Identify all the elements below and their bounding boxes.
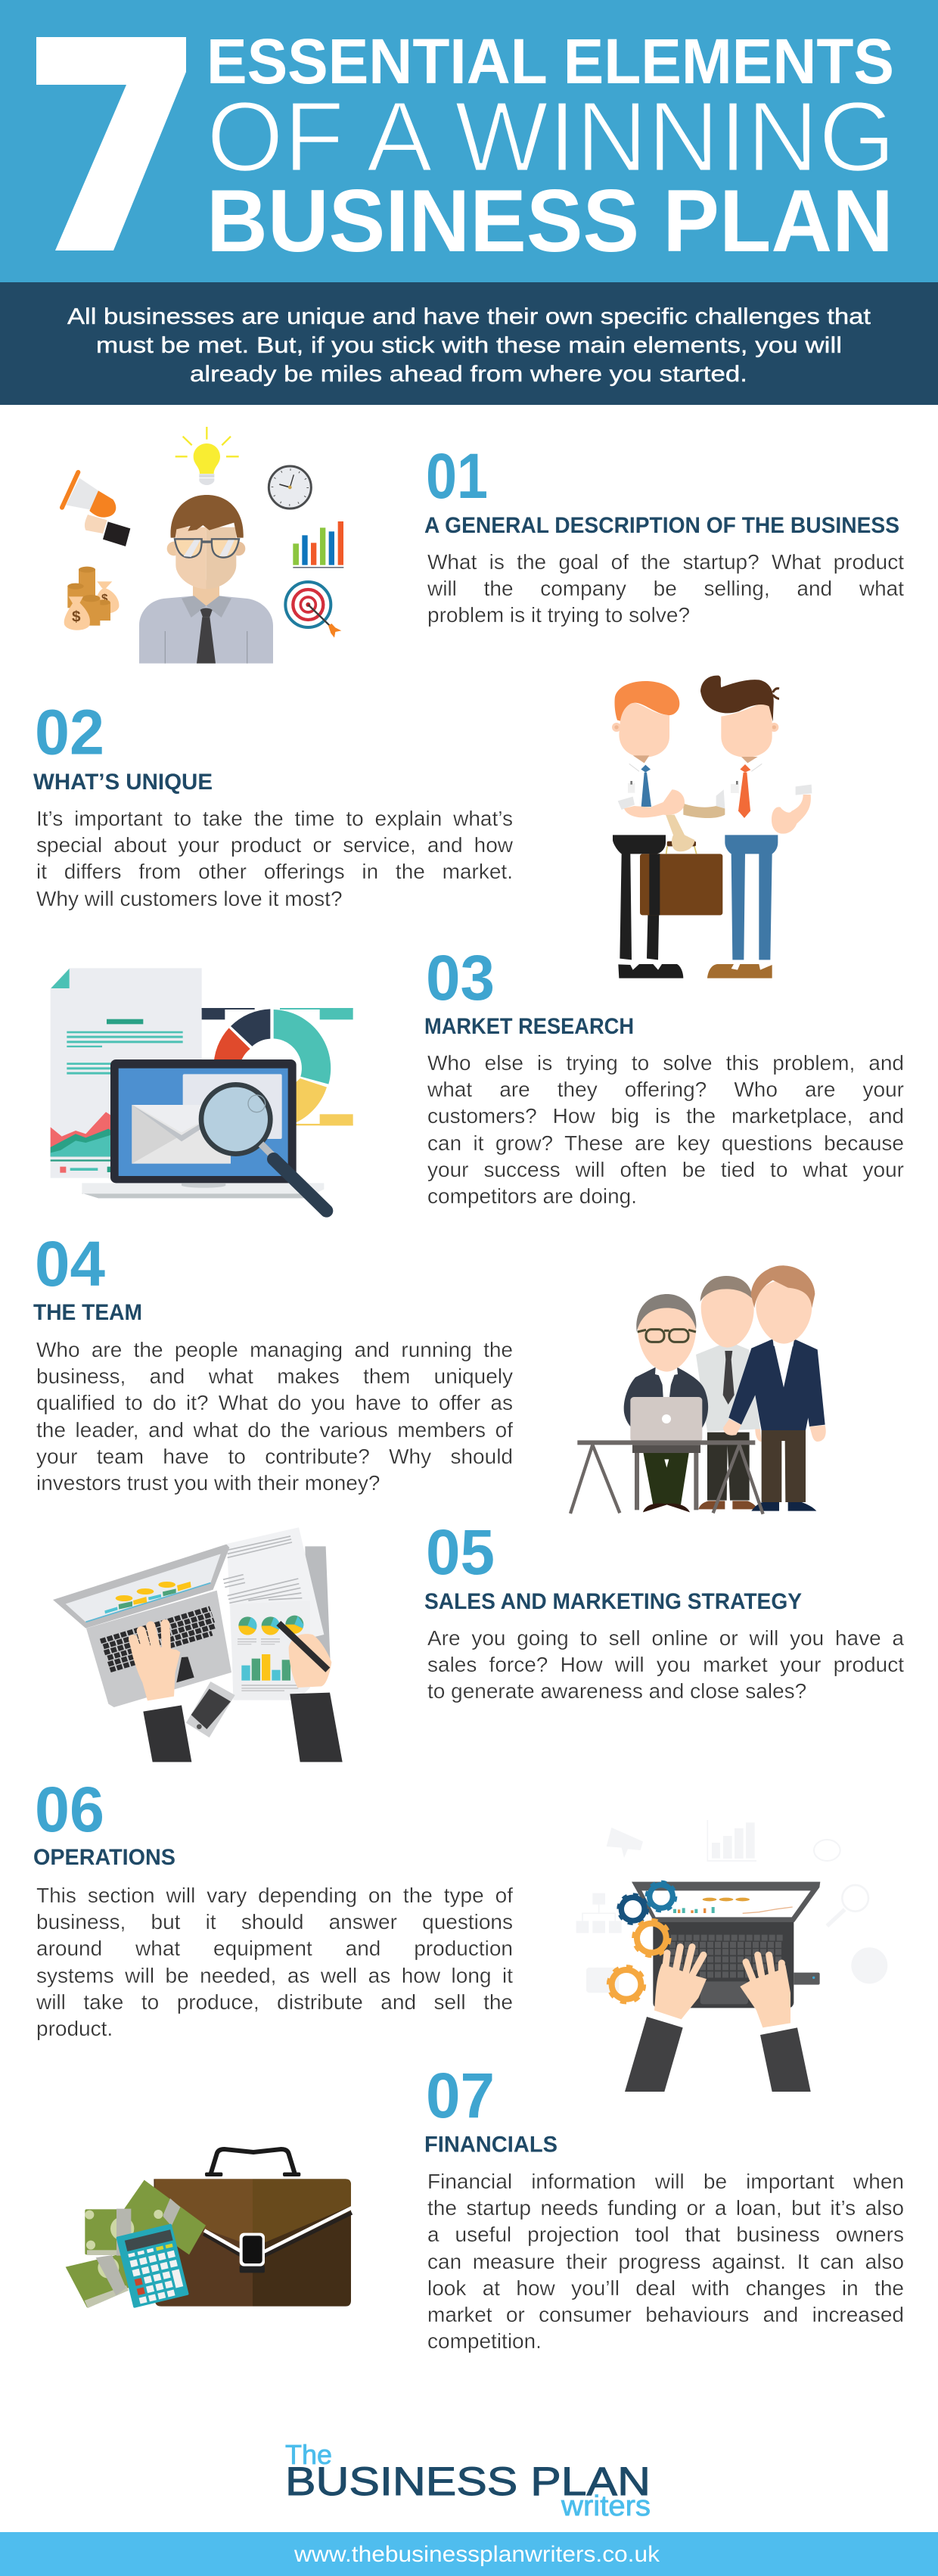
title: ESSENTIAL ELEMENTS — [207, 26, 894, 97]
body text: what are they offering? Who are your — [427, 1078, 904, 1101]
heading: OPERATIONS — [33, 1845, 175, 1870]
body text: your success will often be tied to what your — [427, 1158, 904, 1181]
illustration: businessman with ideas — [62, 427, 343, 664]
heading: FINANCIALS — [424, 2133, 558, 2157]
body text: Who are the people managing and running the — [36, 1338, 513, 1361]
calculator — [116, 2223, 189, 2308]
desk and laptop — [570, 1397, 763, 1514]
front man — [723, 1265, 826, 1511]
intro band: already be miles ahead from where you started. — [190, 362, 747, 387]
body text: the leader, and what do the various members of — [36, 1418, 513, 1442]
section 02 — [33, 696, 513, 915]
document — [51, 968, 202, 1178]
section 06 — [33, 1774, 513, 2045]
faint background icons — [576, 1820, 887, 1993]
cash bundles — [66, 2180, 206, 2308]
right hand and sleeve — [740, 1955, 811, 2092]
body text: What is the goal of the startup? What product — [427, 550, 904, 574]
big number seven — [36, 37, 186, 250]
body text: can it grow? These are key questions because — [427, 1131, 904, 1155]
section 07 — [424, 2060, 904, 2357]
businessman — [139, 495, 273, 664]
illustration: hands on laptop with gears — [576, 1820, 887, 2092]
left man — [612, 681, 683, 978]
intro band: All businesses are unique and have their own specific challenges that — [67, 304, 871, 329]
body text: It’s important to take the time to explain what’s — [36, 807, 513, 830]
title: BUSINESS PLAN — [207, 171, 893, 270]
donut chart — [202, 1008, 353, 1125]
section 03 — [424, 942, 904, 1212]
body text — [36, 1336, 513, 1499]
body text: to generate awareness and close sales? — [427, 1679, 806, 1703]
number 02: 02 — [35, 696, 104, 767]
illustration: briefcase, cash and calculator — [66, 2149, 352, 2308]
section 04 — [33, 1228, 513, 1499]
phone — [186, 1682, 235, 1738]
logo — [285, 2439, 651, 2522]
magnifying glass — [201, 1084, 327, 1211]
body text: systems will be needed, as well as how long it — [36, 1964, 513, 1987]
gears — [609, 1882, 676, 2002]
intro band: must be met. But, if you stick with these main elements, you will — [96, 333, 842, 358]
report charts — [238, 1616, 303, 1691]
heading: WHAT’S UNIQUE — [33, 770, 213, 795]
title: OF A WINNING — [207, 81, 896, 192]
body text: market or consumer behaviours and increased — [427, 2303, 904, 2326]
number 06: 06 — [35, 1774, 104, 1845]
body text: sales force? How will you market your product — [427, 1653, 904, 1676]
body text — [36, 805, 513, 915]
shaking hands — [624, 789, 725, 851]
body text — [427, 1625, 904, 1708]
footer bar: www.thebusinessplanwriters.co.uk — [294, 2542, 660, 2567]
icon: money bags and coins: $ — [101, 593, 108, 605]
footer bar — [0, 2532, 938, 2576]
body text: the startup needs funding or a loan, but it’s also — [427, 2196, 904, 2220]
body text: Why will customers love it most? — [36, 887, 343, 910]
body text: a useful projection tool that business owners — [427, 2223, 904, 2246]
laptop — [53, 1545, 231, 1707]
icon: bar chart — [293, 521, 343, 568]
body text: competitors are doing. — [427, 1184, 637, 1208]
body text: Are you going to sell online or will you have a — [427, 1626, 904, 1650]
heading: THE TEAM — [33, 1300, 142, 1325]
body text: customers? How big is the marketplace, and — [427, 1104, 904, 1128]
body text: problem is it trying to solve? — [427, 603, 690, 627]
logo: writers — [561, 2490, 651, 2522]
body text: can measure their progress against. It can also — [427, 2250, 904, 2273]
section 05 — [424, 1517, 904, 1708]
body text — [36, 1882, 513, 2045]
section 01 — [424, 440, 904, 632]
icon: money bags and coins: $ — [72, 608, 81, 626]
laptop with email — [82, 1059, 324, 1198]
briefcase — [154, 2149, 352, 2307]
body text: investors trust you with their money? — [36, 1471, 380, 1495]
number 07: 07 — [426, 2060, 495, 2131]
back man — [696, 1276, 762, 1509]
icon: megaphone and hand — [62, 472, 130, 546]
body text — [427, 549, 904, 632]
body text — [427, 1050, 904, 1212]
briefcase — [640, 842, 722, 915]
body text: around what equipment and production — [36, 1937, 513, 1960]
body text: will take to produce, distribute and sell the — [36, 1990, 513, 2014]
body text: will the company be selling, and what — [427, 577, 904, 600]
body text: your team have to contribute? Why should — [36, 1445, 513, 1468]
icon: clock — [269, 466, 311, 509]
body text: competition. — [427, 2329, 542, 2353]
body text: qualified to do it? What do you have to offer as — [36, 1391, 513, 1414]
body text: it differs from other offerings in the market. — [36, 860, 513, 883]
illustration: market research — [51, 968, 353, 1211]
icon: target with arrow — [285, 582, 341, 638]
heading: A GENERAL DESCRIPTION OF THE BUSINESS — [424, 513, 899, 538]
number 05: 05 — [426, 1517, 495, 1588]
laptop — [632, 1882, 820, 2008]
body text: special about your product or service, and how — [36, 833, 513, 857]
logo: BUSINESS PLAN — [285, 2459, 651, 2504]
body text: Financial information will be important when — [427, 2170, 904, 2193]
illustration: handshake — [612, 676, 812, 978]
body text — [427, 2168, 904, 2357]
heading: MARKET RESEARCH — [424, 1014, 634, 1039]
icon: money bags and coins — [64, 567, 119, 630]
papers — [223, 1527, 331, 1700]
body text: Who else is trying to solve this problem, and — [427, 1051, 904, 1075]
right man — [700, 676, 812, 978]
body text: business, but it should answer questions — [36, 1910, 513, 1934]
header banner — [0, 0, 938, 282]
icon: light bulb — [175, 427, 239, 485]
body text: This section will vary depending on the type of — [36, 1884, 513, 1907]
seated man — [624, 1294, 708, 1512]
number 01: 01 — [426, 440, 488, 512]
illustration: the team — [570, 1265, 826, 1514]
body text: look at how you’ll deal with changes in the — [427, 2276, 904, 2300]
body text: product. — [36, 2017, 113, 2040]
number 04: 04 — [35, 1228, 105, 1299]
number 03: 03 — [426, 942, 495, 1013]
intro band — [0, 282, 938, 405]
illustration: laptop and reports — [53, 1527, 343, 1762]
left hand and sleeve — [625, 1947, 707, 2092]
body text: business, and what makes them uniquely — [36, 1364, 513, 1388]
title — [207, 26, 896, 270]
logo: The — [285, 2439, 332, 2470]
hands and sleeves — [130, 1623, 343, 1762]
heading: SALES AND MARKETING STRATEGY — [424, 1589, 802, 1614]
